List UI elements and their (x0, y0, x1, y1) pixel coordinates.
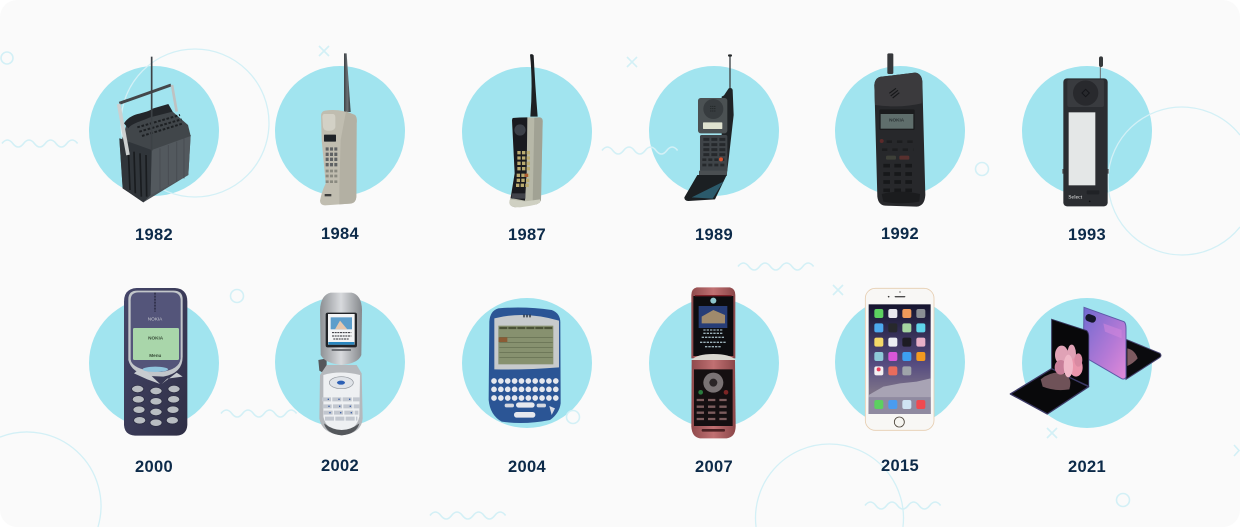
item: 2007 (691, 287, 736, 476)
year label: 2002 (321, 457, 359, 475)
year label: 1989 (695, 226, 733, 244)
phone: 1993 IBM Simon (1062, 56, 1109, 206)
year label: 1992 (881, 225, 919, 243)
item: 1984 (320, 53, 359, 243)
item: 1982 (119, 57, 191, 244)
year label: 1993 (1068, 226, 1106, 244)
phone: 2021 Galaxy Z Flip (1010, 307, 1161, 414)
teal backdrop circles (89, 66, 1152, 428)
phone: 1982 car phone (119, 57, 191, 202)
year label: 2015 (881, 457, 919, 475)
phone: 2007 Motorola RAZR (691, 287, 736, 438)
year label: 1984 (321, 225, 359, 243)
item: 2015 (865, 288, 934, 475)
year label: 1987 (508, 226, 546, 244)
phone: 2002 Samsung flip (318, 293, 363, 435)
phone: 2015 iPhone 6 (865, 288, 934, 430)
year label: 2007 (695, 458, 733, 476)
year label: 2000 (135, 458, 173, 476)
brand text on 1992 display: NOKIA (889, 117, 905, 122)
phone: 1987 DynaTAC (509, 54, 543, 207)
item: 2002 (318, 293, 363, 475)
phone: 1984 brick phone (320, 53, 357, 205)
phone: 2000 Nokia 3310 (124, 288, 187, 436)
item: 1989 (684, 54, 734, 244)
phone: 1989 MicroTAC flip (684, 54, 734, 201)
item: 2000 (124, 288, 187, 476)
brand text on 1993 case: Select (1068, 195, 1083, 201)
item: 1992 (874, 53, 925, 243)
year label: 2004 (508, 458, 546, 476)
phone: 1992 Nokia 1011 (874, 53, 925, 207)
item: 2004 (489, 307, 561, 476)
item: 1987 (508, 54, 546, 244)
2000 softkey label: Menu (149, 353, 162, 358)
2000 display text: NOKIA (148, 335, 164, 340)
year label: 2021 (1068, 458, 1106, 476)
brand text on 2000 bezel: NOKIA (148, 317, 163, 322)
year label: 1982 (135, 226, 173, 244)
item: 1993 (1062, 56, 1109, 244)
item: 2021 (1010, 307, 1161, 476)
phone: 2004 BlackBerry (489, 307, 561, 423)
